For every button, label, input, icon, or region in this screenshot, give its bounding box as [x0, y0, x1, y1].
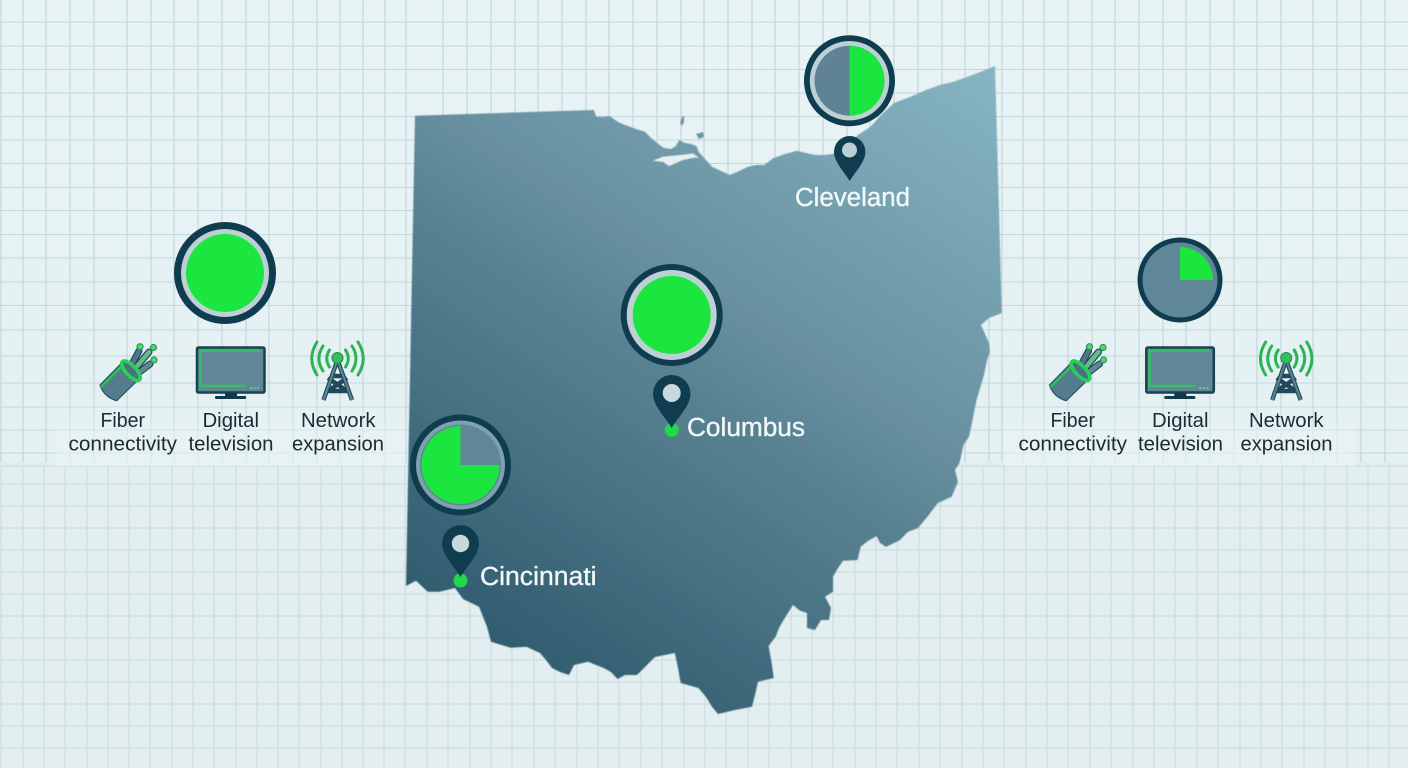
gauge: Cleveland half [804, 35, 895, 126]
gauge: left full [174, 222, 276, 324]
text: Network expansion: Network [1249, 409, 1324, 432]
icon: Columbus pin [653, 375, 690, 437]
text: Digital television [188, 409, 274, 456]
text: Digital television: Digital [202, 409, 259, 432]
gauge: right quarter [1138, 238, 1222, 322]
panel: left services [68, 222, 384, 456]
text: Network expansion: expansion [292, 433, 384, 456]
text: Fiber connectivity: Fiber [1050, 409, 1095, 432]
label: Cleveland: Cleveland [795, 184, 910, 212]
text: Network expansion: expansion [1240, 433, 1332, 456]
panel: right services [1018, 238, 1332, 456]
icon: digital television [197, 348, 264, 399]
icon: network tower [1260, 342, 1312, 400]
text: Digital television: television [188, 433, 274, 456]
text: Digital television [1138, 409, 1223, 456]
text: Fiber connectivity [68, 409, 178, 456]
icon: Cleveland pin [834, 136, 865, 181]
marker: Cleveland [795, 35, 910, 212]
label: Cincinnati: Cincinnati [480, 563, 596, 591]
marker: Cincinnati [410, 414, 596, 591]
icon: Cincinnati pin [442, 525, 479, 588]
map: Ohio state silhouette [406, 66, 1002, 714]
marker: Columbus [621, 264, 805, 442]
text: Digital television: television [1138, 433, 1223, 456]
icon: fiber cable [100, 344, 157, 401]
text: Fiber connectivity: connectivity [1018, 433, 1128, 456]
text: Fiber connectivity [1018, 409, 1128, 456]
text: Fiber connectivity: Fiber [100, 409, 145, 432]
text: Digital television: Digital [1152, 409, 1208, 432]
text: Network expansion [292, 409, 384, 456]
icon: digital television [1146, 348, 1214, 399]
text: Network expansion: Network [301, 409, 376, 432]
icon: network tower [312, 342, 363, 400]
gauge: Cincinnati three quarters [410, 414, 511, 516]
label: Columbus: Columbus [687, 414, 805, 442]
icon: fiber cable [1050, 344, 1106, 401]
text: Network expansion [1240, 409, 1332, 456]
text: Fiber connectivity: connectivity [68, 433, 178, 456]
gauge: Columbus full [621, 264, 723, 366]
